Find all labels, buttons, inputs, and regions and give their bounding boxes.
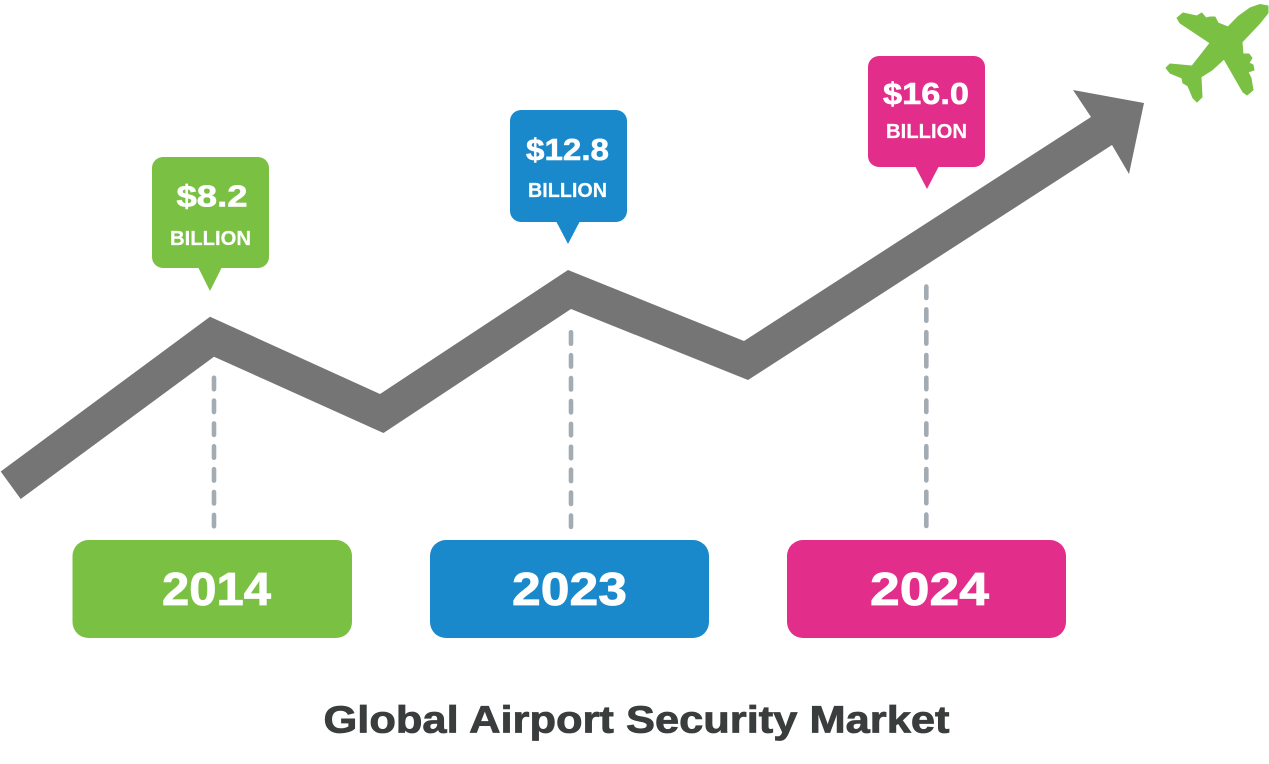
year box: 2024	[787, 540, 1066, 638]
callout: 2023 value	[510, 110, 627, 244]
year box: 2024: 2024	[870, 563, 989, 615]
callout: 2024 value: $16.0	[883, 76, 969, 111]
dashed connector: 2014	[212, 378, 216, 528]
arrow: rising market trend line	[1, 90, 1144, 499]
callout: 2023 value: BILLION	[528, 180, 607, 202]
dashed connector: 2023	[569, 332, 573, 529]
year box: 2023: 2023	[512, 563, 627, 615]
callout: 2024 value: BILLION	[886, 121, 967, 143]
year box: 2014: 2014	[162, 563, 271, 615]
callout: 2014 value: BILLION	[170, 228, 251, 250]
dashed connector: 2024	[924, 287, 929, 528]
year box: 2023	[430, 540, 709, 638]
callout: 2024 value	[868, 56, 985, 189]
callout: 2014 value	[152, 157, 269, 291]
title: Global Airport Security Market	[324, 700, 950, 742]
icon: airplane	[1166, 4, 1268, 102]
year box: 2014	[72, 540, 352, 638]
callout: 2014 value: $8.2	[176, 179, 248, 214]
callout: 2023 value: $12.8	[526, 132, 609, 167]
